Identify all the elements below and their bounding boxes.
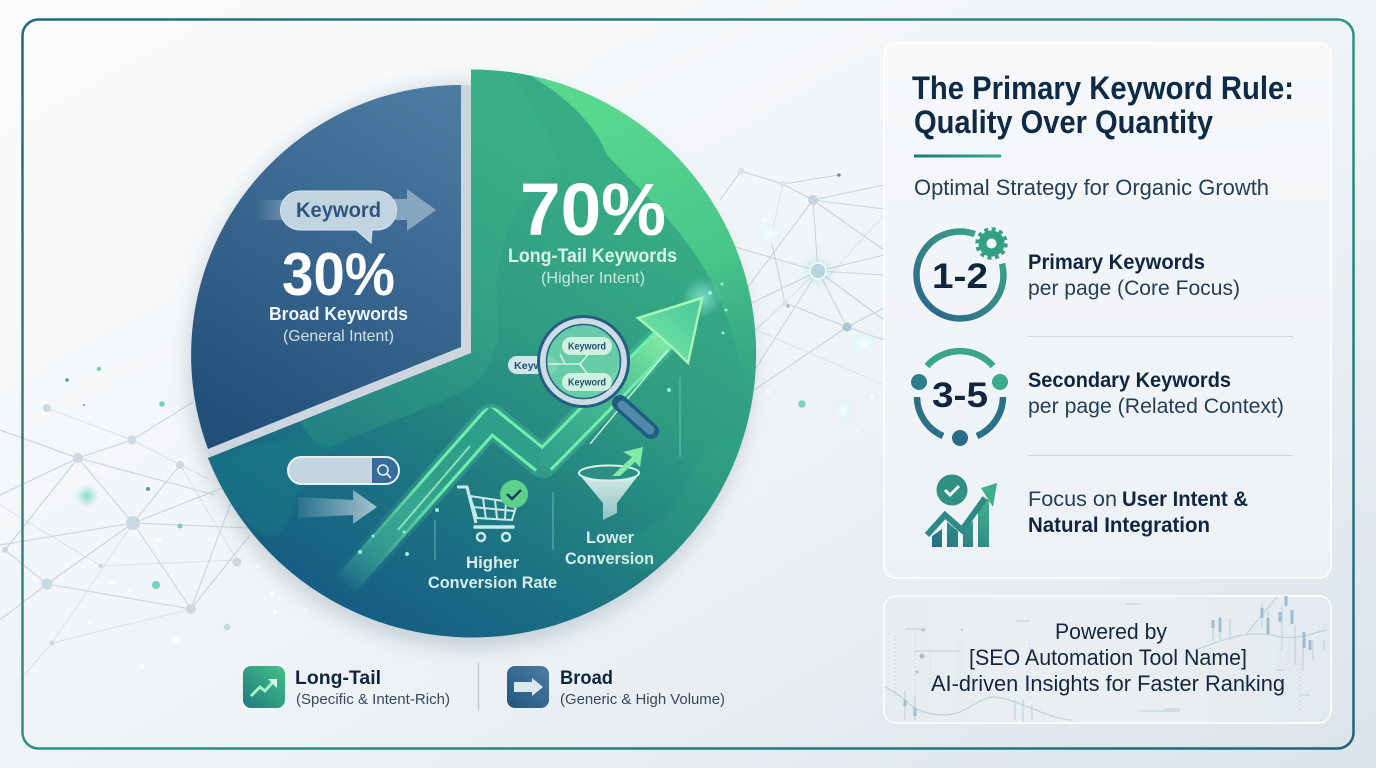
tagline: AI-driven Insights for Faster Ranking (931, 671, 1285, 696)
legend: long-tail: (Specific & Intent-Rich) (296, 691, 450, 708)
bottom chip (562, 373, 612, 391)
icon: ring with gear (916, 229, 1006, 318)
row: user intent (927, 474, 1248, 547)
network pattern: left (0, 367, 307, 680)
tool name: [SEO Automation Tool Name] (969, 645, 1247, 670)
higher conversion rate label: Conversion Rate (428, 573, 557, 592)
higher conversion rate label: Higher (466, 553, 519, 572)
text: Natural Integration (1028, 514, 1210, 537)
text: Focus on (1028, 488, 1117, 511)
70 percent: 70% (520, 168, 666, 251)
top chip: Keyword (568, 342, 606, 352)
icon: ring with gear: 1-2 (932, 257, 988, 296)
pie shadow (188, 84, 752, 648)
lower conversion label (565, 528, 654, 568)
shopping cart icon (457, 480, 528, 541)
heading: The Primary Keyword Rule: (912, 70, 1294, 106)
higher conversion rate label (428, 553, 557, 592)
funnel icon (578, 447, 643, 520)
panel: primary keyword rule (884, 43, 1331, 578)
lower conversion label: Lower (586, 528, 634, 547)
slice: long-tail keywords 70% (205, 40, 780, 637)
text: User Intent & (1122, 488, 1248, 511)
text: per page (Related Context) (1028, 395, 1284, 418)
subheading: Optimal Strategy for Organic Growth (914, 175, 1269, 200)
text (1028, 251, 1240, 300)
search bar icon (288, 457, 399, 484)
top chip (562, 337, 612, 355)
text (1028, 369, 1284, 418)
long-tail keywords label: Long-Tail Keywords (508, 246, 677, 267)
legend: long-tail (243, 666, 450, 708)
growth arrow (345, 278, 722, 585)
panel: powered by (884, 596, 1331, 723)
left chip (508, 356, 558, 374)
legend: broad: Broad (560, 668, 613, 689)
slice: broad keywords 30% (191, 85, 461, 449)
panel card (884, 43, 1331, 578)
general intent label: (General Intent) (283, 328, 394, 345)
text: Primary Keywords (1028, 251, 1205, 274)
sparkles (358, 282, 728, 556)
higher intent label: (Higher Intent) (541, 270, 645, 287)
30 percent: 30% (282, 241, 395, 308)
handle (620, 403, 651, 431)
network pattern: right (720, 168, 884, 434)
text: Secondary Keywords (1028, 369, 1231, 392)
keyword bubble: Keyword (296, 199, 381, 222)
pie chart (188, 40, 780, 648)
row: secondary keywords (911, 351, 1284, 446)
legend (243, 663, 725, 711)
text: per page (Core Focus) (1028, 277, 1240, 300)
keyword arrow (255, 189, 436, 231)
divider lines (435, 377, 680, 560)
heading underline (914, 154, 1001, 158)
bottom chip: Keyword (568, 378, 606, 388)
broad keywords label: Broad Keywords (269, 304, 408, 324)
legend: long-tail: Long-Tail (295, 668, 381, 689)
text (1028, 488, 1248, 537)
legend: broad: (Generic & High Volume) (560, 691, 725, 708)
keyword bubble (280, 191, 396, 243)
magnifier with keyword chips (508, 316, 651, 431)
heading (912, 70, 1294, 140)
legend separator (478, 663, 480, 711)
decorative data charts (885, 596, 1327, 722)
lens (546, 324, 620, 398)
icon: ring with nodes: 3-5 (932, 376, 988, 415)
lower conversion label: Conversion (565, 549, 654, 568)
powered by text: Powered by (1055, 619, 1167, 644)
pie tone layers (208, 70, 756, 566)
legend: broad (507, 666, 725, 708)
heading: Quality Over Quantity (914, 104, 1213, 140)
icon: check and growth chart (927, 474, 997, 547)
panel card (884, 596, 1331, 723)
icon: ring with nodes (911, 351, 1008, 446)
row: primary keywords (916, 229, 1240, 318)
search arrow (298, 490, 377, 524)
left chip: Keyw (514, 361, 542, 372)
